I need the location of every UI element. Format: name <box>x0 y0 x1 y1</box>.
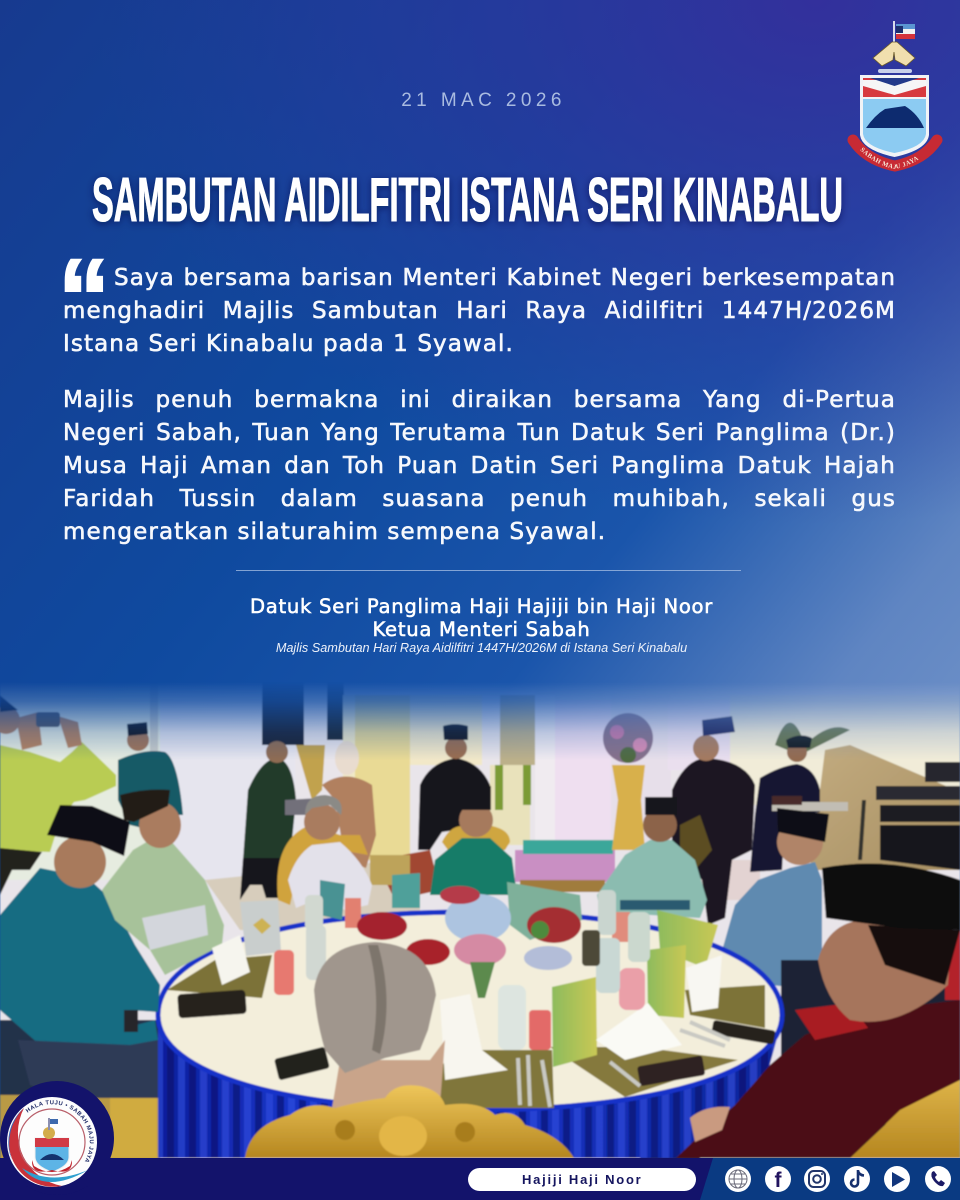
quote paragraph two: Negeri Sabah, Tuan Yang Terutama Tun Datuk Seri Panglima (Dr.) <box>63 420 896 446</box>
icon: facebook: f <box>774 1169 782 1192</box>
arms: motto ribbon: SABAH MAJU JAYA <box>860 148 919 169</box>
photo: gold chair and seated man in green <box>430 786 517 895</box>
photo: standing attendants <box>118 716 960 925</box>
photo: flower centrepiece <box>357 886 581 998</box>
quote paragraph two: mengeratkan silaturahim sempena Syawal. <box>63 519 606 545</box>
arms: flag <box>893 21 915 55</box>
photo: man in yellow-green raising phone <box>0 695 116 895</box>
icon: instagram <box>804 1166 830 1192</box>
photo: menu cards <box>240 873 718 1067</box>
quote paragraph two: Faridah Tussin dalam suasana penuh muhibah, sekali gus <box>63 486 896 512</box>
photo: seated man in teal foreground <box>0 805 160 1098</box>
photo: seated man in slate blue <box>718 808 829 990</box>
quote paragraph two: Musa Haji Aman dan Toh Puan Datin Seri Panglima Datuk Hajah <box>63 453 896 479</box>
badge: motto: HALA TUJU • SABAH MAJU JAYA <box>26 1100 94 1162</box>
quote paragraph one: menghadiri Majlis Sambutan Hari Raya Aidilfitri 1447H/2026M <box>63 298 896 324</box>
badge: shield <box>32 1118 72 1172</box>
quote paragraph one <box>63 265 896 357</box>
photo: guest seen from behind <box>314 942 445 1108</box>
icon: youtube play <box>884 1166 910 1192</box>
event photo: dinner table with guests <box>0 680 960 1160</box>
photo: round table with blue skirt <box>158 912 782 1158</box>
icon: website globe <box>725 1166 751 1192</box>
photo: phones on table <box>177 990 776 1086</box>
arms: hands holding staff <box>873 42 915 66</box>
photo: hall backdrop <box>0 680 960 1160</box>
arms: shield <box>860 75 929 157</box>
social icons <box>725 1166 951 1192</box>
photo: seated man in pale green <box>102 790 224 975</box>
photo: seated man in pale teal <box>597 797 712 918</box>
photo: batik and seat fill beside table <box>0 960 960 1160</box>
photo: cutlery <box>518 1022 730 1107</box>
footer name pill <box>468 1168 696 1191</box>
icon: facebook <box>765 1166 791 1192</box>
footer name pill: Hajiji Haji Noor <box>522 1172 642 1187</box>
quote paragraph one: Istana Seri Kinabalu pada 1 Syawal. <box>63 331 514 357</box>
photo: gold chair foreground <box>244 1078 960 1158</box>
footer bar <box>0 1158 960 1200</box>
quote paragraph two <box>63 387 896 545</box>
quotation mark: “ <box>58 237 110 360</box>
icon: tiktok <box>844 1166 870 1192</box>
attribution: Datuk Seri Panglima Haji Hajiji bin Haji Noor <box>250 595 713 618</box>
photo: decor pillars and flowers <box>495 713 850 850</box>
photo: napkins <box>212 935 722 1080</box>
quote paragraph two: Majlis penuh bermakna ini diraikan bersama Yang di-Pertua <box>63 387 896 413</box>
state coat of arms <box>848 21 942 172</box>
round Hala Tuju badge <box>0 1081 114 1187</box>
divider <box>236 570 741 571</box>
attribution <box>250 595 713 655</box>
arms: motto ribbon <box>848 134 942 172</box>
date: 21 MAC 2026 <box>401 90 566 111</box>
quote paragraph one: Saya bersama barisan Menteri Kabinet Negeri berkesempatan <box>114 265 896 291</box>
attribution: Ketua Menteri Sabah <box>372 618 591 641</box>
photo: seated man in maroon <box>676 864 960 1158</box>
photo: place mats <box>167 955 765 1108</box>
photo: drinks and water bottles <box>274 890 650 1050</box>
photo: gold chair and seated man in white shirt <box>277 795 372 910</box>
attribution: Majlis Sambutan Hari Raya Aidilfitri 1447H/2026M di Istana Seri Kinabalu <box>276 641 687 655</box>
icon: phone <box>925 1166 951 1192</box>
